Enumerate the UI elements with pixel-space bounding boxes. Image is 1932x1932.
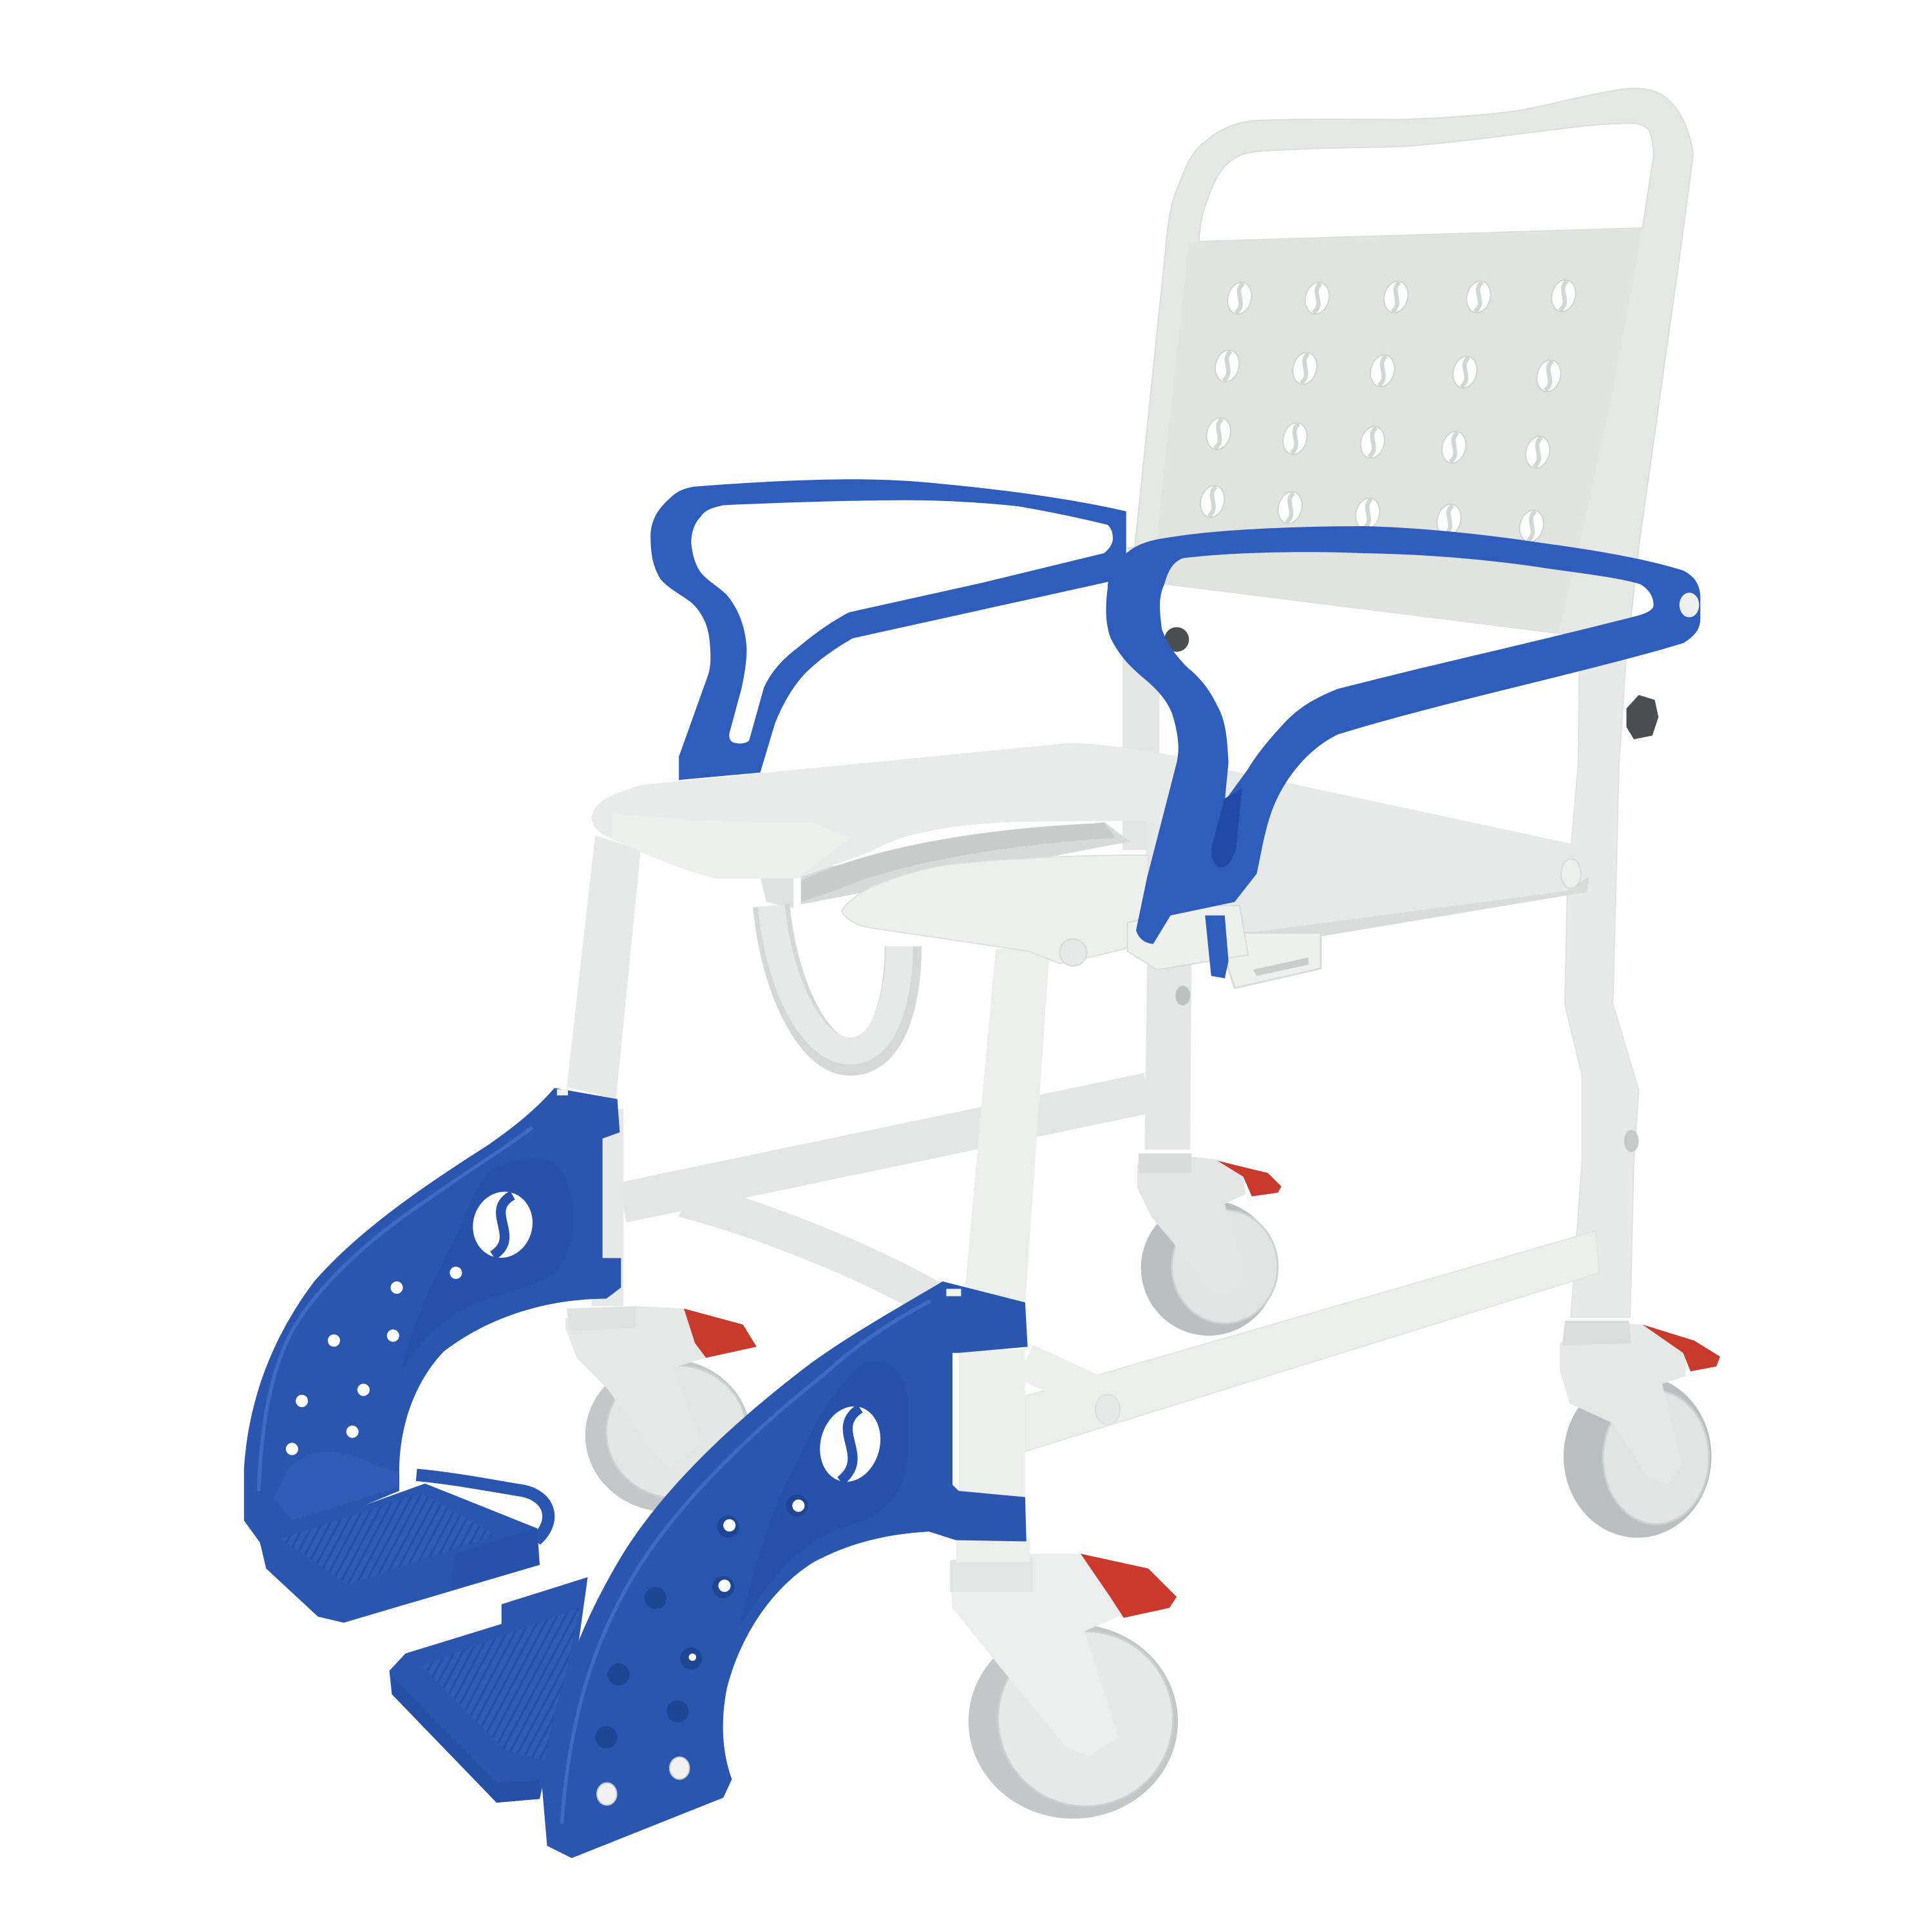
screws <box>597 1757 689 1805</box>
plate lip <box>451 1528 540 1589</box>
logo <box>466 1185 540 1265</box>
recess <box>401 1159 574 1374</box>
rim highlight <box>562 1301 931 1824</box>
far arm rest <box>650 479 1126 780</box>
rim highlight <box>259 1128 533 1491</box>
arm clip <box>1205 916 1229 978</box>
tab <box>946 1289 961 1296</box>
holes <box>286 1267 462 1455</box>
seat right front wing <box>842 855 1148 966</box>
holes <box>595 1495 808 1748</box>
near front caster <box>950 1554 1178 1819</box>
tab <box>557 1089 568 1095</box>
rear right post <box>1565 634 1639 1317</box>
seat latch <box>1226 933 1321 988</box>
rear inner post upper <box>1122 591 1159 850</box>
heel strap <box>417 1475 549 1540</box>
back rest panel <box>1156 229 1641 633</box>
seat left wing <box>591 743 1232 878</box>
lower cross bar <box>1025 1231 1599 1452</box>
near height adjustment knob <box>1627 695 1658 739</box>
front left leg <box>567 835 641 1099</box>
near arm rest <box>1106 526 1700 944</box>
bar disc <box>1095 1395 1120 1425</box>
right foot plate <box>390 1577 588 1803</box>
seat disc <box>1561 859 1581 888</box>
back rest frame <box>1128 88 1693 636</box>
seat right underside <box>1248 876 1589 946</box>
seat wing pin <box>1059 939 1087 966</box>
hinge <box>274 1452 399 1520</box>
front right footrest <box>542 1282 1028 1858</box>
rear inner post lower <box>1144 961 1191 1150</box>
front right leg <box>963 949 1050 1306</box>
rear cross bar <box>622 1093 1148 1202</box>
ribbed tread <box>281 1493 495 1584</box>
foot plate <box>260 1484 540 1623</box>
logo <box>811 1399 889 1489</box>
arm mount block <box>1128 905 1248 970</box>
arm pivot pin <box>1680 592 1699 618</box>
front left caster <box>565 1306 757 1512</box>
diagonal brace <box>684 1199 949 1309</box>
panel holes <box>1197 278 1579 544</box>
commode pan holder <box>760 822 1130 908</box>
rear inner caster <box>1137 1153 1282 1336</box>
front right leg lower <box>956 1349 1030 1562</box>
recess <box>739 1361 908 1627</box>
far height adjustment knob <box>1164 627 1189 652</box>
front left leg lower <box>591 1109 623 1306</box>
commode U-shaped support <box>772 905 903 1057</box>
seat rear right section <box>1146 759 1593 949</box>
lower brace <box>1025 1361 1092 1392</box>
plate edge <box>392 1676 540 1803</box>
front left footrest <box>244 1088 621 1623</box>
rear right caster <box>1560 1321 1720 1538</box>
open hole centres <box>689 1499 804 1661</box>
arm slot recess <box>1211 788 1242 867</box>
ribbed tread <box>421 1608 579 1762</box>
